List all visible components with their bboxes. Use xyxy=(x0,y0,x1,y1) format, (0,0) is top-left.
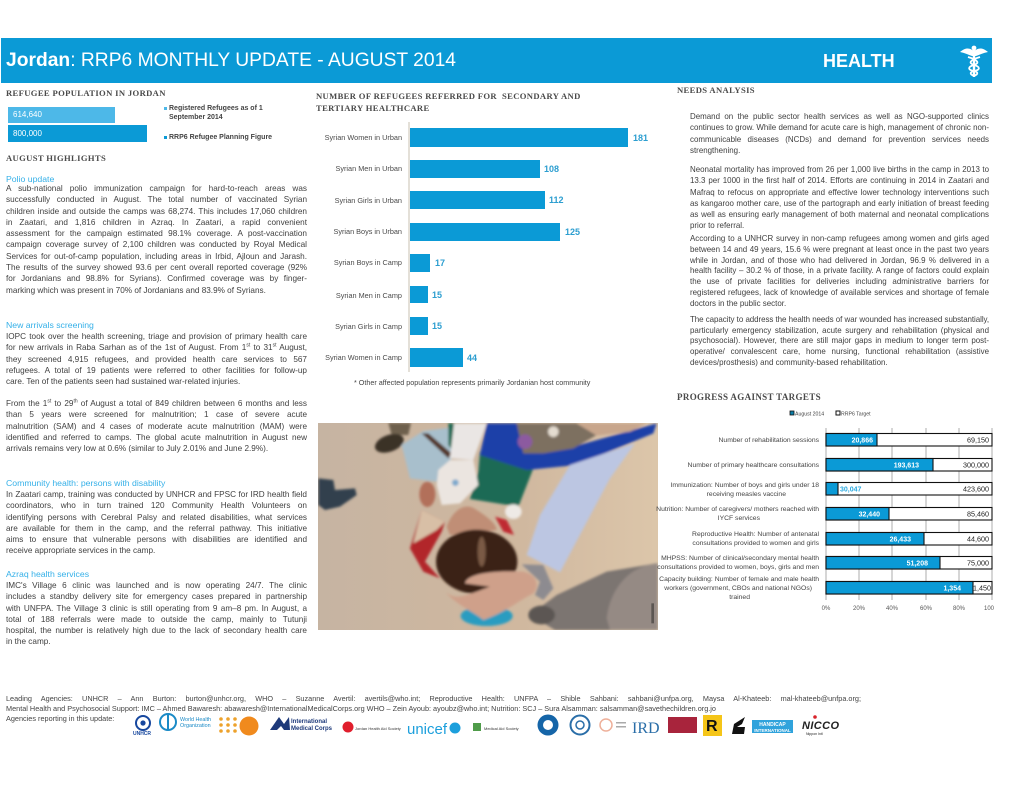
footer: contacts: Leading Agencies: UNHCR – Ann Burton: burton@unhcr.org, WHO – Suzanne Avertil: avertils@who.int; Reproductive Health: UNFPA – Shible Sahbani: sahbani@unfpa.org, Maysa Al-Khateeb: mal-khateeb@unfpa.org; xyxy=(6,694,861,703)
text: malnutrition screening xyxy=(6,398,307,453)
bar chart: referrals: 15 xyxy=(432,321,442,331)
chart: progress against targets: 423,600 xyxy=(963,484,989,494)
text: needs paragraph 4: psychosocial). However, there are still major gaps in medium to longer term post- xyxy=(690,336,989,345)
text: community health: identifying persons with Cerebral Palsy and related disabilities, what services xyxy=(6,513,307,522)
logo: WHO: Organization xyxy=(180,723,211,729)
header banner xyxy=(1,38,992,83)
text: community health: In Zaatari camp, training was conducted by UNHCR and FPSC for IRD health field xyxy=(6,490,307,499)
bar chart: referrals: 17 xyxy=(435,258,445,268)
text: azraq: in the camp. xyxy=(6,637,51,646)
chart: progress against targets: Number of primary healthcare consultations xyxy=(688,462,820,469)
text: polio update: successfully conducted in August. The total number of vaccinated Syrian xyxy=(6,195,307,204)
logo: medical society xyxy=(473,723,519,731)
chart: progress against targets: 1,354 xyxy=(943,586,961,592)
logo: ring xyxy=(600,719,626,731)
logo: IRC xyxy=(703,715,722,736)
text: needs paragraph 4: operative/ convalescent care, home nursing, functional rehabilitation (assistive xyxy=(690,347,989,356)
text: community health xyxy=(6,490,307,555)
bar chart: referrals: Syrian Women in Urban xyxy=(325,133,402,142)
text: polio update: for Jordanians and 98.8% for Syrians). Confirmed coverage was by finger- xyxy=(6,274,307,283)
legend item: planning: RRP6 Refugee Planning Figure xyxy=(169,134,272,141)
text: polio update: marking which was present in 70% of Jordanians and 83.9% of Syrians. xyxy=(6,286,266,295)
bar: registered refugees xyxy=(8,107,115,123)
text: malnutrition screening: than 5 years were screened for malnutrition; 1 case of severe acute xyxy=(6,410,307,419)
icon: caduceus xyxy=(960,46,988,77)
footer: contacts xyxy=(6,694,861,713)
text: needs paragraph 3: According to a UNHCR survey in non-camp refugees among women and girls aged xyxy=(690,234,989,243)
chart: progress against targets: MHPSS: Number of clinical/secondary mental health xyxy=(661,555,819,562)
chart: progress against targets xyxy=(656,410,995,612)
text: polio update xyxy=(6,184,307,295)
chart: progress against targets: 69,150 xyxy=(967,436,989,444)
bar chart: referrals: 108 xyxy=(544,164,559,174)
chart: progress against targets: 30,047 xyxy=(840,486,862,494)
legend: progress chart: August 2014 xyxy=(795,412,824,418)
text: new arrivals xyxy=(6,332,307,386)
logo: Handicap International xyxy=(752,720,793,733)
subheading: polio: Polio update xyxy=(6,174,54,184)
bar chart: referrals: 125 xyxy=(565,227,580,237)
logo: UNICEF: unicef xyxy=(407,721,448,738)
bar chart: referrals: Syrian Boys in Camp xyxy=(334,258,402,267)
bar chart: referrals: 181 xyxy=(633,133,648,143)
chart: progress against targets: 193,613 xyxy=(894,462,919,470)
chart: progress against targets: 100 xyxy=(984,606,995,612)
text: needs paragraph 2 xyxy=(690,165,989,230)
logo: Handicap International: INTERNATIONAL xyxy=(754,728,791,733)
text: azraq xyxy=(6,581,308,646)
footer: contacts: Mental Health and Psychosocial Support: IMC – Ahmed Bawaresh: abawaresh@InternationalMedicalCorps.org WHO – Zein Ayoub: ayoubz@who.int; Nutrition: SCJ – Sura Alsamman: salsamman@savethechildren.org.jo xyxy=(6,704,716,713)
bar: registered refugees: 614,640 xyxy=(13,110,42,119)
logo: black mark xyxy=(732,717,745,734)
subheading: community health: Community health: persons with disability xyxy=(6,478,165,488)
text: needs paragraph 2: prior to referral. xyxy=(690,221,744,230)
text: needs paragraph 4: devices/prosthesis) and community-based rehabilitation. xyxy=(690,358,888,367)
text: needs paragraph 3: while in Jordan, and of those who had delivered in Jordan, 96.9 % delivered in a xyxy=(690,256,989,265)
text: polio update: children inside and outside the camps was 68,274. This includes 17,060 children xyxy=(6,207,307,216)
logo: IOM style xyxy=(570,716,590,734)
chart: progress against targets: 80% xyxy=(953,606,966,612)
chart: progress against targets: 20% xyxy=(853,606,866,612)
heading: needs analysis: NEEDS ANALYSIS xyxy=(677,85,755,95)
subheading: azraq: Azraq health services xyxy=(6,569,89,579)
chart: progress against targets: 75,000 xyxy=(967,558,989,568)
logo: UNHCR: UNHCR xyxy=(133,731,151,737)
logo: NICCO: NICCO xyxy=(802,720,839,732)
text: community health: aims to ensure that vulnerable persons with disabilities are identified and xyxy=(6,535,307,544)
bar: planning figure: 800,000 xyxy=(13,129,42,138)
text: needs paragraph 2: Mafraq to refocus on appropriate and effective lower technology interventions such xyxy=(690,188,989,197)
logo: medical society: Medical Aid Society xyxy=(484,726,519,731)
legend item: registered: Registered Refugees as of 1 xyxy=(169,105,263,112)
logo: NICCO: Nippon Intl xyxy=(806,732,823,736)
heading: refugee population: REFUGEE POPULATION IN JORDAN xyxy=(6,88,166,98)
text: needs paragraph 4 xyxy=(690,315,989,367)
heading: august highlights: AUGUST HIGHLIGHTS xyxy=(6,153,106,163)
logo: IRC: R xyxy=(706,718,718,735)
logo: Save the Children style: Jordan Health Aid Society xyxy=(355,726,401,731)
bar chart: referrals: Syrian Men in Urban xyxy=(335,164,402,173)
chart: progress against targets: Number of rehabilitation sessions xyxy=(718,437,820,444)
text: azraq: with UNFPA. The Village 3 clinic is still operating from 9 am–8 pm. In August, a xyxy=(6,604,307,613)
bar chart: referrals xyxy=(325,122,648,372)
text: needs paragraph 2: 13.3 per 1000 in the first half of 2014. Efforts are continuing in 2014 in Zaatari and xyxy=(690,176,989,185)
logo: International Medical Corps: Medical Corps xyxy=(291,726,333,732)
logo: IRD: IRD xyxy=(632,720,660,737)
logo: WHO: World Health xyxy=(180,717,211,723)
chart: progress against targets: workers (government, CBOs and national NGOs) xyxy=(663,585,812,592)
text: needs paragraph 3: between 14 and 49 years, 15.6 % were pregnant at least once in the past two years xyxy=(690,245,989,254)
population bars xyxy=(8,107,147,142)
text: polio update: Services for out-of-camp population, including areas in Irbid, Ajloun and Jarash. xyxy=(6,252,307,261)
text: needs paragraph 3: registered refugees, lack of knowledge of available services and shortage of female xyxy=(690,288,989,297)
bar chart: referrals: 44 xyxy=(467,353,477,363)
chart: progress against targets: 20,866 xyxy=(852,438,873,444)
text: community health: receive appropriate services in the camp. xyxy=(6,546,155,555)
subheading: new arrivals: New arrivals screening xyxy=(6,320,94,330)
logo: International Medical Corps xyxy=(270,717,333,732)
text: azraq: total of 188 referrals were made to outside the camp, mainly to Tutunji xyxy=(6,615,307,624)
heading: referrals chart: TERTIARY HEALTHCARE xyxy=(316,102,430,112)
logo: blue emblem xyxy=(538,714,558,736)
text: needs paragraph 3: health facility – 30.2 % of those, in a private facility. A range of factors could explain xyxy=(690,266,989,275)
logo: UNFPA xyxy=(219,716,258,736)
text: polio update: in Zaatari, and 1,816 children in Azraq. In Zaatari, a rapid convenient xyxy=(6,218,307,227)
chart: progress against targets: 51,208 xyxy=(907,560,928,568)
text: new arrivals: care. Ten of the patients seen had sustained war-related injuries. xyxy=(6,377,240,386)
text: needs paragraph 1: communicable diseases (NCDs) and demand for prevention services needs xyxy=(690,135,989,144)
text: azraq: includes a standby delivery site for emergency cases prepared in partnership xyxy=(6,592,307,601)
chart: progress against targets: 44,600 xyxy=(967,534,989,544)
chart: progress against targets: 26,433 xyxy=(890,536,911,544)
heading: referrals chart: NUMBER OF REFUGEES REFERRED FOR SECONDARY AND xyxy=(316,91,581,101)
text: needs paragraph 4: particularly emergency stabilization, acute surgery and rehabilitation (physical and xyxy=(690,326,989,335)
chart: progress against targets: receiving measles vaccine xyxy=(707,491,786,498)
bar chart: referrals: Syrian Women in Camp xyxy=(325,353,402,362)
legend item: registered xyxy=(164,104,263,121)
text: new arrivals: for new arrivals in Raba Sarhan as of the 1st of August. From 1st to 31st August, xyxy=(6,343,307,352)
text: azraq: hospital, the number is relatively high due to the lack of secondary health care xyxy=(6,626,307,635)
logo: Save the Children style xyxy=(342,722,401,732)
chart: progress against targets: IYCF services xyxy=(718,515,761,522)
text: new arrivals: refugees. A total of 19 patients were referred to other facilities for follow-up xyxy=(6,366,307,375)
chart: progress against targets: 40% xyxy=(886,606,899,612)
bar chart: referrals: 112 xyxy=(549,195,564,205)
chart: progress against targets: 32,440 xyxy=(859,512,880,518)
chart: progress against targets: Capacity building: Number of female and male health xyxy=(659,576,819,583)
legend: progress chart xyxy=(790,411,871,418)
legend: population xyxy=(164,104,272,141)
chart: progress against targets: 300,000 xyxy=(963,460,989,470)
text: new arrivals: IOPC took over the health screening, triage and provision of primary health care xyxy=(6,332,307,341)
chart: progress against targets: 60% xyxy=(920,606,933,612)
chart: progress against targets: consultations provided to women, boys, girls and men xyxy=(657,564,819,571)
text: polio update: campaign coverage survey of 2,100 children was conducted by Royal Medical xyxy=(6,240,307,249)
text: new arrivals: they screened 4,915 refugees, and provided health care services to 567 xyxy=(6,355,307,364)
heading: progress against targets: PROGRESS AGAINST TARGETS xyxy=(677,392,821,402)
text: needs paragraph 4: The capacity to address the health needs of war wounded has increased substantially, xyxy=(690,315,989,324)
logo: International Medical Corps: International xyxy=(291,719,327,725)
bar: planning figure xyxy=(8,125,147,142)
text: community health: coordinators, who in turn trained 120 Community Health Volunteers on xyxy=(6,501,307,510)
text: needs paragraph 2: as kangaroo mother care, use of the partograph and early initiation of breast feeding xyxy=(690,199,989,208)
text: polio update: assessment for the campaign estimated 98.1% coverage. A post-vaccination xyxy=(6,229,307,238)
text: needs paragraph 1 xyxy=(690,112,989,155)
text: needs paragraph 3: doctors in the public sector. xyxy=(690,299,786,308)
bar chart: referrals: Syrian Girls in Urban xyxy=(335,196,402,205)
text: malnutrition screening: arrivals remains very low at 0.6% (similar to July 2.01% and June 2.9%). xyxy=(6,444,268,453)
text: needs paragraph 3: the use of private facilities for deliveries including administrative barriers for xyxy=(690,277,989,286)
chart: progress against targets: 1,450 xyxy=(973,584,991,592)
chart: progress against targets: 0% xyxy=(822,606,831,612)
chart: progress against targets: Immunization: Number of boys and girls under 18 xyxy=(671,482,819,489)
text: needs paragraph 1: Demand on the public sector health services as well as NGO-supported clinics xyxy=(690,112,989,121)
chart: progress against targets: Reproductive Health: Number of antenatal xyxy=(692,531,819,538)
sector heading: HEALTH xyxy=(823,51,895,71)
text: needs paragraph 1: continues to grow. While demand for acute care is high, management of chronic non- xyxy=(690,123,989,132)
bar chart: referrals: Syrian Men in Camp xyxy=(336,291,402,300)
chart: progress against targets: consultations provided to women and girls xyxy=(692,540,820,547)
logo: UNHCR xyxy=(133,716,151,737)
chart footnote: * Other affected population represents primarily Jordanian host community xyxy=(354,378,590,387)
heading: referrals chart xyxy=(316,91,581,112)
bar chart: referrals: 15 xyxy=(432,290,442,300)
logo: NICCO xyxy=(802,715,839,736)
legend item: registered: September 2014 xyxy=(169,114,223,121)
text: needs paragraph 3 xyxy=(690,234,990,308)
text: needs paragraph 2: as well as ensuring early management of both maternal and neonatal complications xyxy=(690,210,989,219)
logo: Handicap International: HANDICAP xyxy=(759,722,786,728)
text: community health: are available for them in the camp, and the referral pathway. This initiative xyxy=(6,524,307,533)
title: Jordan: RRP6 MONTHLY UPDATE - AUGUST 2014 xyxy=(6,50,456,71)
bar chart: referrals: Syrian Boys in Urban xyxy=(333,227,402,236)
text: azraq: IMC's Village 6 clinic was launched and is now operating 24/7. The clinic xyxy=(6,581,307,590)
text: malnutrition screening: malnutrition (SAM) and 4 cases of moderate acute malnutrition (MAM) were xyxy=(6,422,307,431)
footer: agencies reporting label: Agencies reporting in this update: xyxy=(6,714,114,723)
photo: child receiving polio vaccine xyxy=(318,423,658,630)
chart: progress against targets: Nutrition: Number of caregivers/ mothers reached with xyxy=(656,506,819,513)
text: malnutrition screening: From the 1st to 29th of August a total of 849 children between 6 months and less xyxy=(6,398,307,408)
text: malnutrition screening: identified and referred to camps. The global acute malnutrition in August new xyxy=(6,433,307,442)
partner logos xyxy=(133,713,839,738)
chart: progress against targets: trained xyxy=(729,594,750,601)
logo: WHO xyxy=(160,714,211,730)
legend: progress chart: RRP6 Target xyxy=(841,412,871,418)
text: polio update: The results of the survey showed 93.6 per cent overall reported coverage (92% xyxy=(6,263,307,272)
bar chart: referrals: Syrian Girls in Camp xyxy=(335,322,402,331)
text: needs paragraph 1: strengthening. xyxy=(690,146,740,155)
text: polio update: A sub-national polio immunization campaign for hard-to-reach areas was xyxy=(6,184,307,193)
text: needs paragraph 2: Neonatal mortality has improved from 26 per 1,000 live births in the camp in 2013 to xyxy=(690,165,989,174)
chart: progress against targets: 85,460 xyxy=(967,510,989,518)
logo: red panel xyxy=(668,717,697,733)
